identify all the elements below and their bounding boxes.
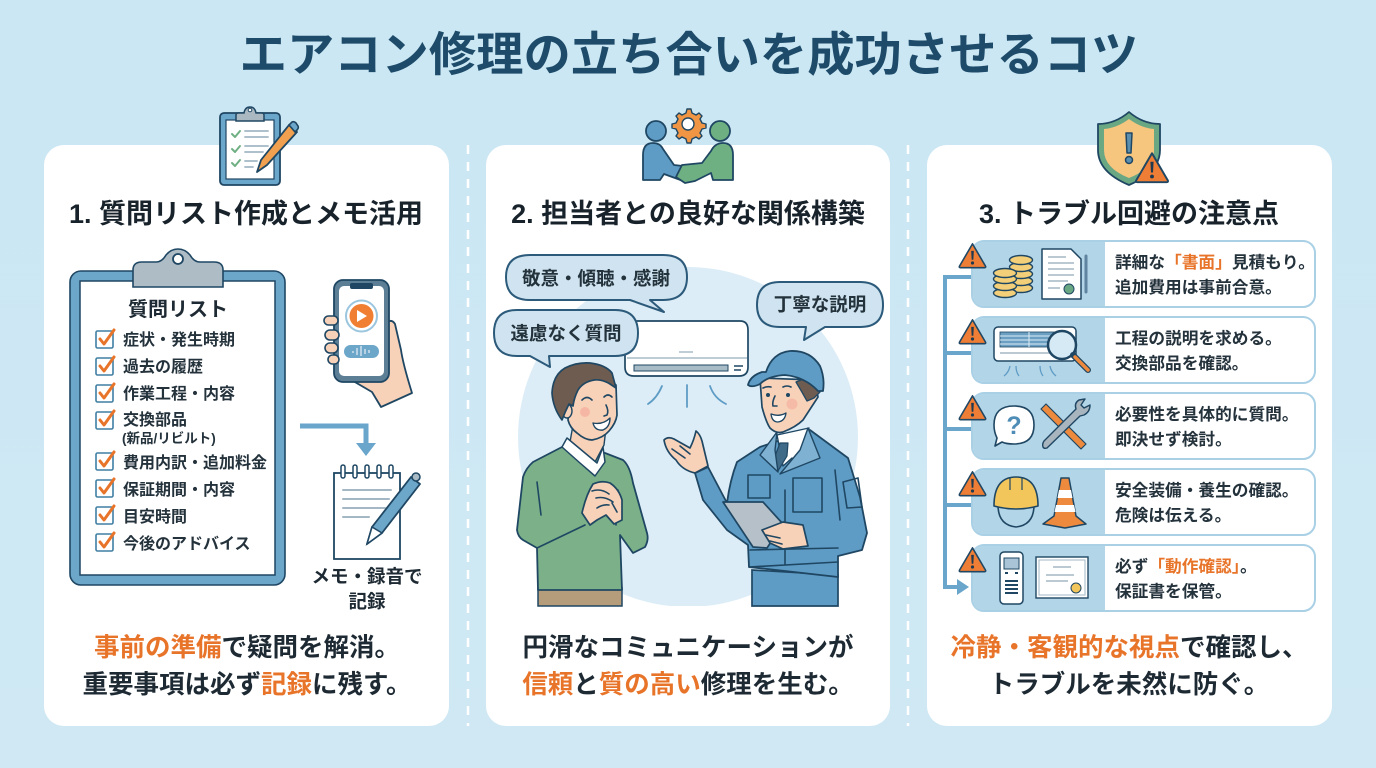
checklist: 目安時間 (123, 507, 187, 526)
icon: shield with warning (1098, 112, 1168, 185)
checklist: 過去の履歴 (123, 357, 203, 376)
row 4 (959, 469, 1315, 535)
icon: notepad and pen (334, 465, 420, 559)
illustration: conversation scene (486, 255, 890, 616)
title: エアコン修理の立ち合いを成功させるコツ (240, 29, 1138, 82)
checklist: 症状・発生時期 (123, 331, 235, 349)
speech bubble: 丁寧 (757, 282, 883, 340)
summary text: 信頼と質の高い修理を生む。 (522, 671, 854, 699)
icon: warning (959, 472, 986, 496)
checklist: 費用内訳・追加料金 (123, 453, 267, 472)
row 4: 危険は伝える。 (1115, 506, 1231, 525)
row 2: 交換部品を確認。 (1115, 354, 1248, 373)
summary text: 冷静・客観的な視点で確認し、 (950, 634, 1308, 662)
tie (775, 443, 788, 471)
clasped hands (582, 482, 622, 525)
summary text: 重要事項は必ず記録に残す。 (83, 670, 411, 699)
icon: handshake and gear (643, 109, 733, 183)
icon: question bubble and tools (994, 399, 1090, 449)
panel: 3 trouble avoidance (927, 112, 1332, 726)
panel dividers (468, 145, 908, 726)
cap (748, 351, 824, 391)
summary text: 事前の準備で疑問を解消。 (94, 634, 400, 662)
heading: 1. 質問リスト作成とメモ活用 (69, 199, 423, 229)
arrow: phone to memo (300, 426, 376, 456)
air conditioner (625, 321, 748, 407)
icon: coins and document (994, 249, 1086, 299)
icon: question bubble and tools: ? (1006, 412, 1022, 440)
row 5: 保証書を保管。 (1115, 581, 1232, 601)
panel: 1 question list (44, 107, 449, 726)
speech bubble: 敬意: 敬意・傾聴・感謝 (522, 268, 670, 289)
icon: warning (959, 396, 986, 420)
row 1 (959, 241, 1315, 307)
face (568, 372, 617, 440)
summary text (83, 634, 411, 699)
icon: warning (959, 548, 986, 572)
clipboard (723, 502, 783, 548)
neck and shirt (777, 428, 809, 466)
icon: clipboard and pen (220, 107, 298, 185)
panel: 2 relationship (486, 109, 890, 726)
row 1: 追加費用は事前合意。 (1115, 278, 1282, 297)
jacket (695, 430, 867, 577)
pants (752, 570, 838, 606)
icon: warning (959, 244, 986, 268)
checklist: 作業工程・内容 (123, 384, 235, 403)
memo caption: メモ・録音で (311, 566, 423, 587)
list heading: 質問リスト (128, 298, 228, 321)
icon: helmet and cone (994, 477, 1086, 528)
summary text: トラブルを未然に防ぐ。 (989, 670, 1269, 699)
summary text (522, 633, 854, 699)
icon: AC and magnifier (994, 327, 1088, 376)
text: 詳細な「書面」見積もり。 (1115, 252, 1315, 272)
connector arrow (945, 277, 972, 595)
checklist: 交換部品 (123, 411, 187, 429)
checklist: 今後のアドバイス (123, 534, 251, 553)
speech bubble: 遠慮 (494, 310, 638, 367)
speech bubble: 遠慮: 遠慮なく質問 (510, 323, 622, 344)
text: 必ず「動作確認」。 (1115, 557, 1257, 576)
collar (562, 438, 605, 476)
checklist: (新品/リビルト) (122, 430, 216, 446)
icon: warning (959, 320, 986, 344)
large clipboard (70, 249, 285, 585)
text: 工程の説明を求める。 (1115, 328, 1282, 348)
neck (570, 425, 606, 462)
speech bubble: 敬意 (506, 255, 687, 312)
row 3: 即決せず検討。 (1115, 430, 1232, 449)
text: 必要性を具体的に質問。 (1115, 405, 1299, 424)
speech bubble: 丁寧: 丁寧な説明 (774, 294, 866, 315)
checklist (96, 330, 267, 553)
jacket collar (760, 432, 778, 472)
person: customer (517, 363, 648, 606)
hair (552, 363, 616, 420)
icon: remote and certificate (1000, 552, 1088, 604)
holding hand (762, 522, 808, 549)
sweater (517, 447, 648, 590)
person: technician (664, 351, 867, 606)
heading: 3. トラブル回避の注意点 (979, 198, 1279, 229)
summary text (950, 634, 1308, 699)
row 2 (959, 317, 1315, 383)
checklist: 保証期間・内容 (123, 480, 235, 499)
face (760, 378, 818, 432)
summary text: 円滑なコミュニケーションが (522, 633, 854, 662)
gesturing hand (664, 431, 708, 473)
heading: 2. 担当者との良好な関係構築 (511, 199, 865, 229)
icon: hand holding phone (324, 280, 412, 407)
row 3 (959, 393, 1315, 459)
row 5 (959, 545, 1315, 611)
panel: 1 question list: 記録 (348, 591, 386, 612)
text: 安全装備・養生の確認。 (1115, 480, 1299, 500)
